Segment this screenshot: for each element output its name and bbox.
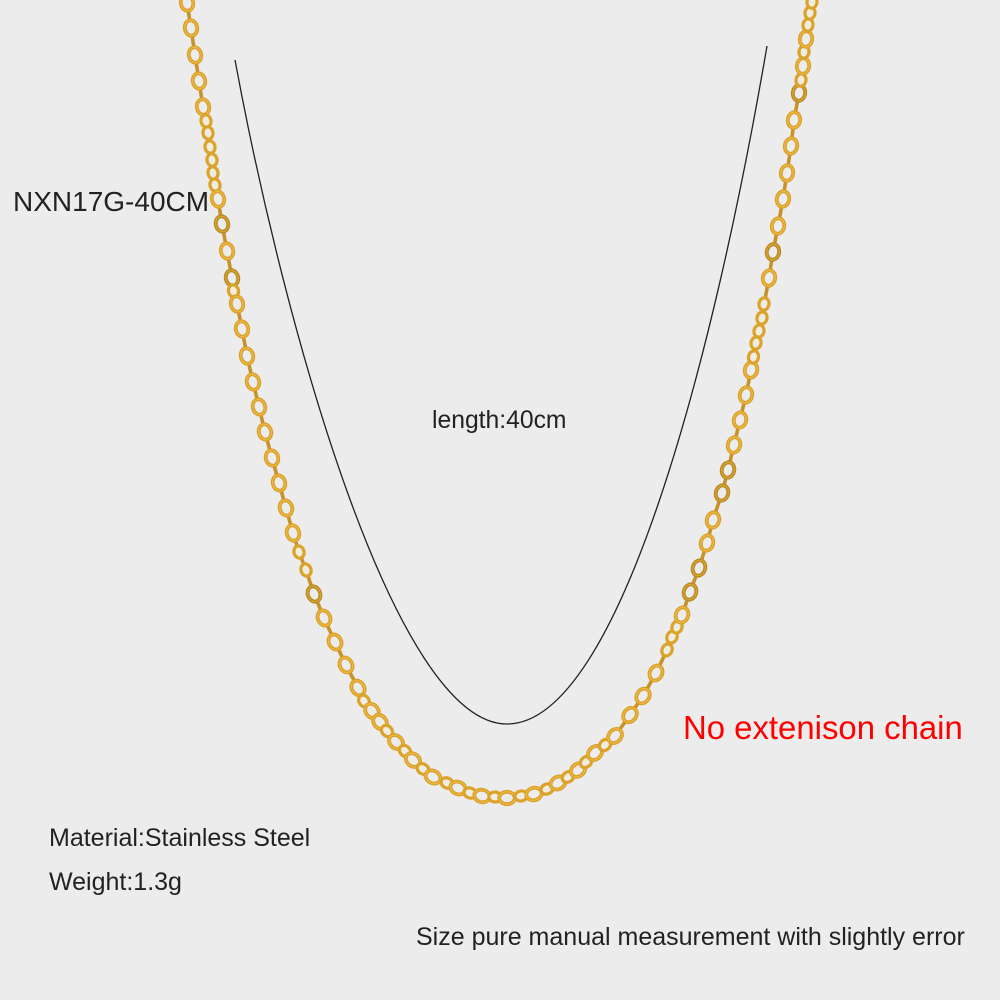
product code label: NXN17G-40CM bbox=[13, 186, 209, 217]
left chain links bbox=[180, 0, 502, 804]
length label: length:40cm bbox=[432, 407, 566, 434]
connector strand bbox=[186, 0, 813, 798]
extension chain note: No extenison chain bbox=[683, 709, 963, 746]
measurement disclaimer: Size pure manual measurement with slightly error bbox=[416, 923, 965, 951]
weight spec: Weight:1.3g bbox=[49, 868, 182, 896]
gold chain bbox=[180, 0, 818, 804]
material spec: Material:Stainless Steel bbox=[49, 824, 310, 852]
right chain links bbox=[499, 0, 818, 804]
length measurement curve bbox=[235, 46, 767, 724]
